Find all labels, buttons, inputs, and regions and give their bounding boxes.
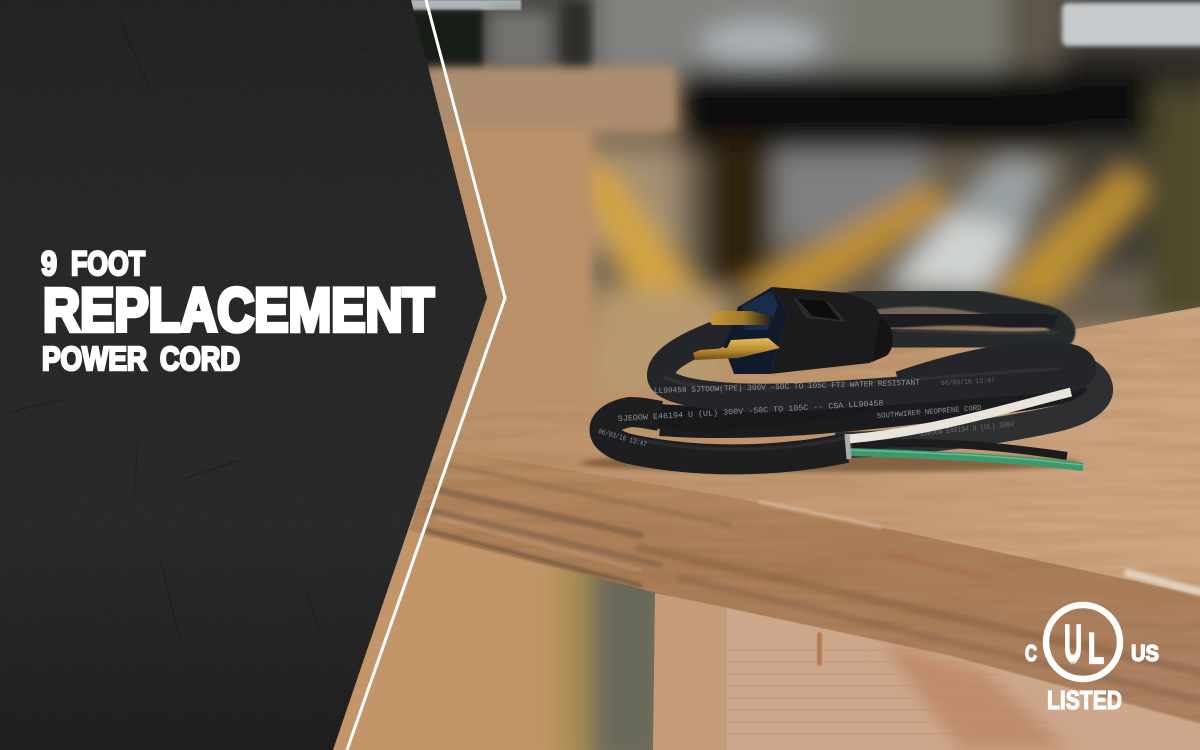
title line: replacement: REPLACEMENT [43, 276, 434, 344]
cord jacket printing: 06/03/16 13:47 [597, 428, 647, 450]
white chevron outline [347, 0, 505, 750]
table top surface [430, 307, 1200, 595]
support posts [653, 593, 1200, 750]
exposed wires [847, 392, 1083, 467]
title line: power cord: POWER [42, 340, 147, 377]
outer right coil [835, 365, 1100, 445]
middle coil [625, 393, 900, 418]
upper coil [661, 322, 1082, 398]
under coil [660, 385, 1090, 427]
rear inner band [880, 315, 1055, 326]
listed label: LISTED [1047, 685, 1122, 715]
title line: power cord: CORD [160, 340, 240, 377]
plug body [724, 287, 893, 374]
cord jacket printing: SJEOOW E46194 U (UL) 300V [919, 421, 1015, 439]
cord jacket printing: 06/03/16 13:47 [941, 377, 995, 388]
rear coil loop [840, 296, 1064, 343]
letter c: C [1025, 640, 1037, 666]
table front edge [410, 450, 1200, 722]
title [41, 245, 434, 377]
title line: 9 foot [41, 245, 145, 283]
cord jacket printing [597, 377, 1015, 450]
letter L: L [1088, 625, 1104, 673]
title line: 9 foot: FOOT [71, 245, 145, 283]
UL ring [1046, 605, 1120, 679]
registered symbol: ® [1069, 655, 1077, 667]
cord jacket printing: SJEOOW E46194 U (UL) 300V -50C TO 105C -- CSA LL90458 [618, 399, 884, 424]
cord jacket printing: LL90458 SJTOOW(TPE) 300V -50C TO 105C FT2 WATER RESISTANT [654, 379, 920, 396]
shadow under cord [580, 454, 1080, 472]
UL listed certification mark [1025, 605, 1159, 715]
lower coil [604, 412, 846, 459]
background: blurred workshop photo [300, 0, 1200, 750]
letters us: US [1131, 640, 1159, 666]
dark angled panel [0, 0, 500, 750]
UL listed certification mark: U [1064, 615, 1082, 673]
power cord coil with plug [597, 287, 1100, 467]
plug prongs [693, 311, 780, 360]
title line: power cord [42, 340, 240, 377]
plywood table [400, 300, 1200, 750]
cord jacket printing: SOUTHWIRE® NEOPRENE CORD [877, 404, 982, 421]
title line: 9 foot: 9 [41, 245, 57, 283]
